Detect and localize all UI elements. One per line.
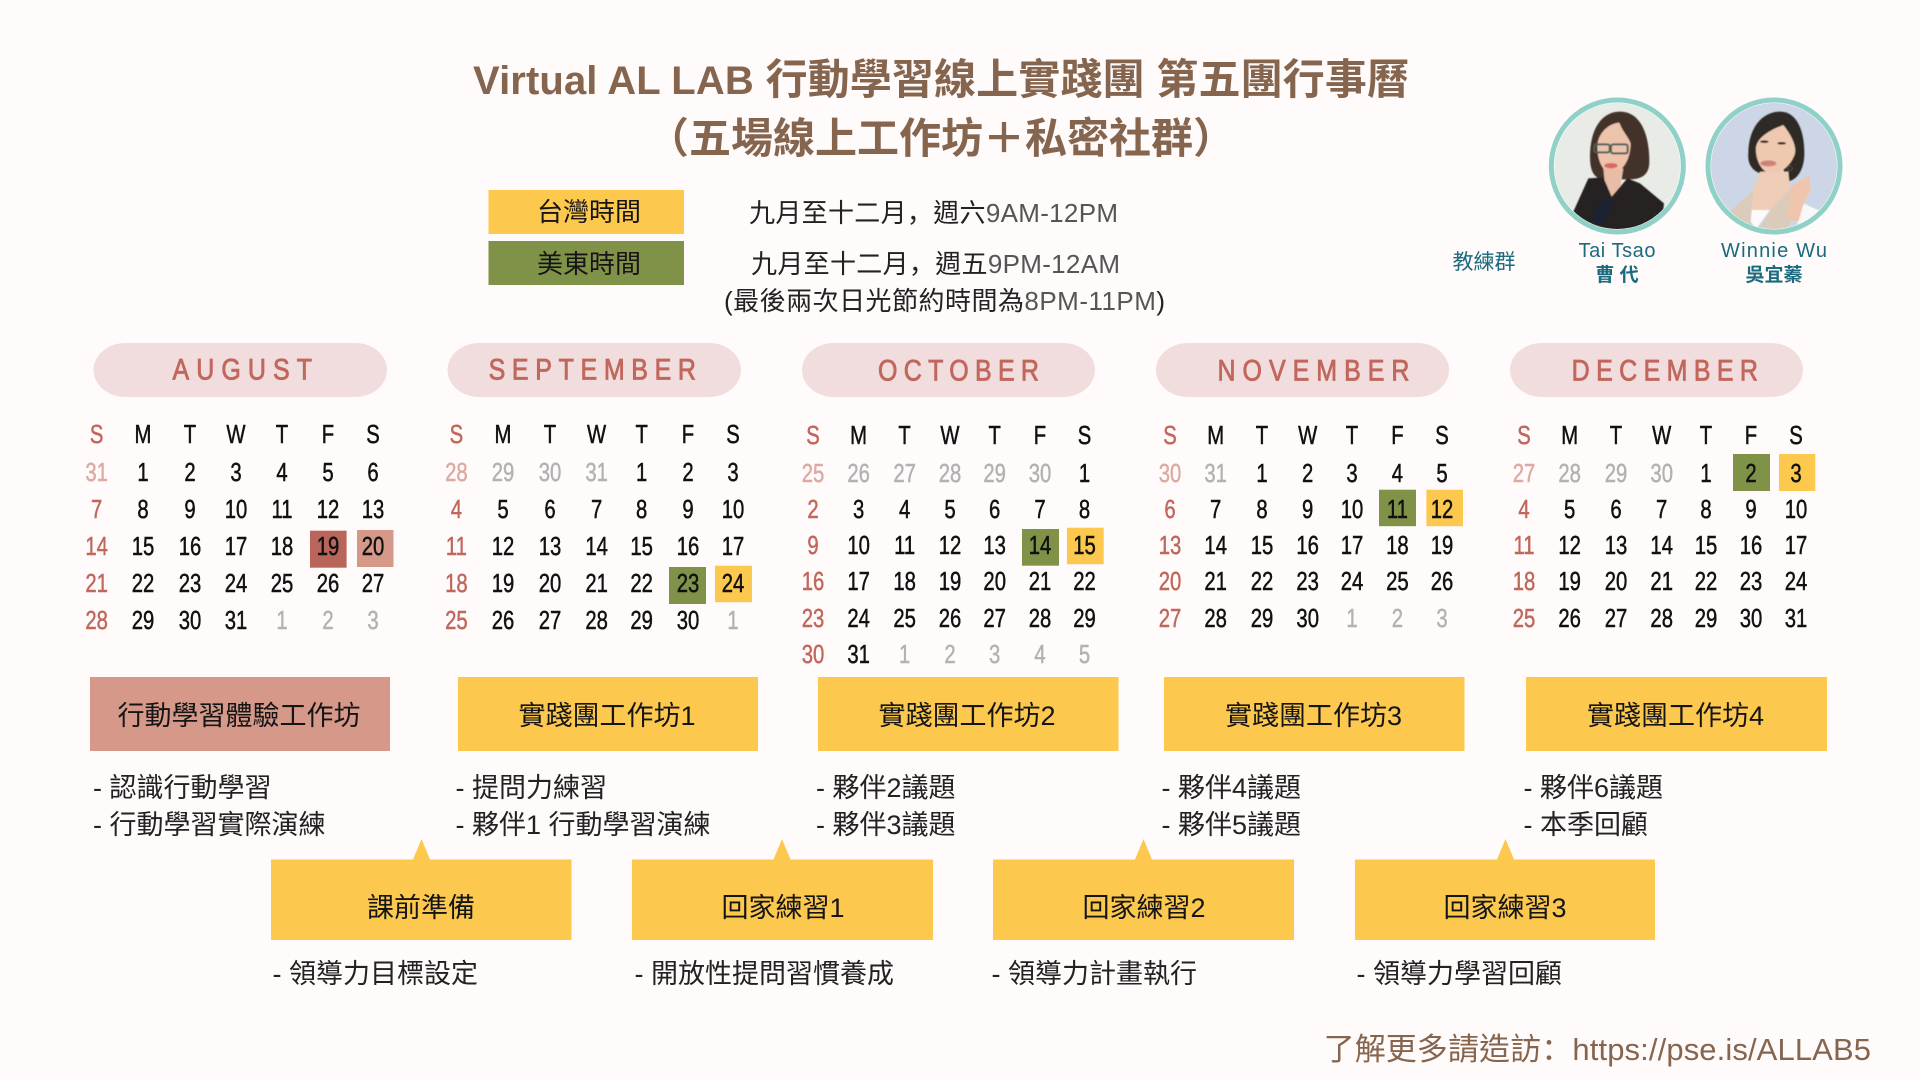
- workshop box: workshop 1: [458, 677, 758, 751]
- date grid: November: 2: [1392, 604, 1403, 633]
- legend: Taiwan time: [488, 190, 1118, 234]
- date grid: August: 31: [225, 606, 247, 635]
- date grid: August: 2: [322, 606, 334, 635]
- date grid: September: 3: [727, 458, 739, 487]
- date grid: November: 30: [1296, 604, 1319, 633]
- date grid: August: 25: [271, 569, 293, 598]
- date grid: September: M: [495, 420, 511, 449]
- coaches label: 教練群: [1452, 251, 1516, 274]
- date grid: December: 27: [1513, 459, 1535, 488]
- date grid: December: 27: [1605, 604, 1627, 633]
- portrait: Tai Tsao: [1550, 100, 1687, 233]
- date grid: September: S: [726, 420, 740, 449]
- highlighted days: 11 and 12 November: [1379, 490, 1463, 526]
- date grid: October: 5: [1079, 640, 1090, 669]
- date grid: October: 8: [1079, 495, 1090, 524]
- highlighted days: 23 and 24 September: [669, 566, 752, 604]
- date grid: August: 2: [184, 458, 196, 487]
- date grid: December: 15: [1695, 531, 1717, 560]
- date grid: September: 1: [636, 458, 647, 487]
- date grid: September: F: [682, 420, 694, 449]
- date grid: December: [1513, 421, 1807, 633]
- date grid: August: 3: [230, 458, 242, 487]
- date grid: December: 3: [1790, 459, 1802, 488]
- date grid: November: 16: [1296, 531, 1319, 560]
- date grid: October: 16: [802, 567, 824, 596]
- callout note: pre-course preparation: - 領導力目標設定: [272, 959, 478, 989]
- date grid: November: 18: [1386, 531, 1409, 560]
- date grid: September: 31: [585, 458, 608, 487]
- calendar: August: [85, 343, 394, 635]
- date grid: November: 14: [1204, 531, 1227, 560]
- date grid: August: 21: [85, 569, 108, 598]
- date grid: November: 10: [1341, 495, 1363, 524]
- date grid: August: 11: [271, 495, 293, 524]
- date grid: August: W: [226, 420, 246, 449]
- date grid: August: 1: [276, 606, 288, 635]
- footer link: 了解更多請造訪：https://pse.is/ALLAB5: [1324, 1024, 1871, 1069]
- date grid: December: 2: [1745, 459, 1757, 488]
- calendar: September: [445, 343, 752, 635]
- date grid: October: 31: [847, 640, 870, 669]
- date grid: October: S: [1078, 421, 1091, 450]
- date grid: November: 17: [1341, 531, 1363, 560]
- date grid: November: 12: [1431, 495, 1453, 524]
- date grid: December: 19: [1558, 567, 1581, 596]
- date grid: December: 31: [1785, 604, 1807, 633]
- date grid: September: 2: [682, 458, 694, 487]
- date grid: December: 20: [1605, 567, 1627, 596]
- coach name: Tai Tsao: 曹 代: [1595, 264, 1639, 286]
- workshop notes: workshop 2: - 夥伴2議題: [816, 773, 956, 803]
- date grid: December: 5: [1564, 495, 1575, 524]
- date grid: August: 9: [184, 495, 196, 524]
- callout: homework 1: [632, 839, 933, 940]
- date grid: September: 14: [585, 532, 608, 561]
- date grid: October: 23: [802, 604, 824, 633]
- date grid: August: 26: [317, 569, 339, 598]
- date grid: October: 17: [847, 567, 870, 596]
- date grid: October: 3: [989, 640, 1000, 669]
- date grid: September: 23: [677, 569, 699, 598]
- month banner: December: [1510, 343, 1803, 397]
- date grid: September: T: [636, 420, 648, 449]
- date grid: October: M: [850, 421, 867, 450]
- date grid: August: S: [366, 420, 380, 449]
- workshop notes: experience workshop: [93, 773, 326, 840]
- date grid: December: 17: [1785, 531, 1807, 560]
- date grid: December: 8: [1700, 495, 1712, 524]
- date grid: September: 6: [544, 495, 556, 524]
- date grid: October: 29: [983, 459, 1006, 488]
- date grid: October: 11: [894, 531, 915, 560]
- date grid: October: 21: [1029, 567, 1051, 596]
- date grid: December: 6: [1610, 495, 1622, 524]
- workshop notes: workshop 3: - 夥伴5議題: [1162, 810, 1301, 840]
- date grid: September: 19: [492, 569, 514, 598]
- date grid: September: 9: [682, 495, 694, 524]
- callout note: homework 3: - 領導力學習回顧: [1356, 959, 1562, 989]
- date grid: November: 26: [1431, 567, 1453, 596]
- date grid: August: 29: [132, 606, 154, 635]
- date grid: October: 6: [989, 495, 1000, 524]
- date grid: December: F: [1745, 421, 1757, 450]
- date grid: August: 20: [362, 532, 384, 561]
- date grid: September: 5: [497, 495, 509, 524]
- date grid: October: 26: [939, 604, 961, 633]
- date grid: September: 24: [722, 569, 744, 598]
- date grid: December: 26: [1558, 604, 1581, 633]
- date grid: August: 31: [85, 458, 108, 487]
- date grid: November: 24: [1341, 567, 1363, 596]
- date grid: October: 2: [807, 495, 819, 524]
- date grid: November: 21: [1204, 567, 1227, 596]
- date grid: October: T: [898, 421, 911, 450]
- date grid: November: F: [1391, 421, 1404, 450]
- date grid: August: 13: [362, 495, 384, 524]
- date grid: December: W: [1652, 421, 1671, 450]
- callout: homework 2: 回家練習2: [1082, 893, 1206, 923]
- date grid: August: 27: [362, 569, 384, 598]
- workshop box: workshop 4: 實踐團工作坊4: [1587, 701, 1764, 731]
- month banner: December: DECEMBER: [1572, 354, 1758, 387]
- date grid: October: 19: [939, 567, 961, 596]
- date grid: November: 20: [1159, 567, 1181, 596]
- workshop notes: workshop 4: - 夥伴6議題: [1524, 773, 1663, 803]
- workshop box: workshop 2: [818, 677, 1118, 751]
- calendar: December: [1510, 343, 1815, 633]
- date grid: September: 28: [585, 606, 608, 635]
- date grid: September: 8: [636, 495, 647, 524]
- date grid: September: 26: [492, 606, 514, 635]
- date grid: October: F: [1034, 421, 1046, 450]
- date grid: October: 14: [1029, 531, 1051, 560]
- date grid: September: 7: [591, 495, 602, 524]
- date grid: October: 24: [847, 604, 870, 633]
- date grid: November: M: [1207, 421, 1224, 450]
- month banner: October: [802, 343, 1095, 397]
- workshop notes: workshop 1: - 夥伴1 行動學習演練: [456, 810, 711, 840]
- date grid: November: W: [1298, 421, 1317, 450]
- date grid: October: W: [940, 421, 960, 450]
- title: Virtual AL LAB 行動學習線上實踐團 第五團行事曆: [473, 56, 1409, 103]
- date grid: September: S: [450, 420, 463, 449]
- date grid: October: 27: [983, 604, 1006, 633]
- date grid: December: 28: [1558, 459, 1581, 488]
- portrait: Winnie Wu: [1707, 100, 1843, 233]
- workshop notes: experience workshop: - 認識行動學習: [93, 773, 272, 803]
- date grid: November: 15: [1251, 531, 1273, 560]
- date grid: September: 13: [539, 532, 561, 561]
- date grid: December: 12: [1558, 531, 1581, 560]
- callout: homework 3: [1355, 839, 1655, 940]
- date grid: August: 4: [276, 458, 288, 487]
- date grid: December: 16: [1740, 531, 1762, 560]
- month banner: September: [448, 343, 741, 397]
- date grid: September: 30: [677, 606, 699, 635]
- date grid: November: 13: [1159, 531, 1181, 560]
- date grid: October: 4: [1034, 640, 1046, 669]
- date grid: December: 24: [1785, 567, 1807, 596]
- date grid: November: 7: [1210, 495, 1221, 524]
- date grid: October: 1: [899, 640, 910, 669]
- workshop notes: workshop 2: [816, 773, 956, 840]
- date grid: September: 12: [492, 532, 514, 561]
- date grid: August: [85, 420, 384, 635]
- date grid: August: 30: [179, 606, 201, 635]
- date grid: December: 25: [1513, 604, 1535, 633]
- date grid: August: F: [322, 420, 334, 449]
- callout note: homework 2: - 領導力計畫執行: [992, 959, 1197, 989]
- date grid: October: 15: [1073, 531, 1096, 560]
- date grid: September: T: [544, 420, 556, 449]
- workshop notes: workshop 1: [456, 773, 711, 840]
- date grid: September: 27: [539, 606, 561, 635]
- date grid: November: 1: [1346, 604, 1358, 633]
- legend: US Eastern time: 九月至十二月，週五9PM-12AM: [751, 244, 1120, 281]
- workshop box: workshop 1: 實踐團工作坊1: [518, 701, 696, 731]
- date grid: September: W: [587, 420, 606, 449]
- workshop notes: workshop 2: - 夥伴3議題: [816, 810, 956, 840]
- date grid: October: 28: [1029, 604, 1051, 633]
- date grid: November: 8: [1256, 495, 1268, 524]
- date grid: December: M: [1561, 421, 1578, 450]
- date grid: August: 19: [317, 532, 339, 561]
- title: （五場線上工作坊＋私密社群）: [647, 115, 1235, 162]
- date grid: November: 29: [1251, 604, 1273, 633]
- date grid: October: 22: [1073, 567, 1096, 596]
- date grid: September: 20: [539, 569, 561, 598]
- date grid: September: 29: [492, 458, 514, 487]
- date grid: September: 4: [451, 495, 462, 524]
- coach name: Tai Tsao: Tai Tsao: [1578, 240, 1656, 262]
- date grid: November: 3: [1436, 604, 1448, 633]
- date grid: November: 5: [1436, 459, 1448, 488]
- workshop box: workshop 4: [1526, 677, 1827, 751]
- workshop notes: workshop 4: [1524, 773, 1663, 840]
- date grid: August: T: [184, 420, 196, 449]
- date grid: August: 14: [85, 532, 108, 561]
- date grid: October: 25: [802, 459, 824, 488]
- date grid: October: 3: [853, 495, 864, 524]
- date grid: November: 27: [1159, 604, 1181, 633]
- callout note: homework 1: - 開放性提問習慣養成: [634, 959, 894, 989]
- date grid: October: 30: [1029, 459, 1051, 488]
- date grid: November: 6: [1164, 495, 1176, 524]
- date grid: November: 19: [1431, 531, 1453, 560]
- date grid: December: 28: [1650, 604, 1673, 633]
- date grid: December: 7: [1656, 495, 1667, 524]
- date grid: August: S: [90, 420, 103, 449]
- workshop notes: experience workshop: - 行動學習實際演練: [93, 810, 326, 840]
- calendar: November: [1156, 343, 1463, 633]
- date grid: August: 7: [91, 495, 102, 524]
- date grid: October: S: [806, 421, 820, 450]
- workshop notes: workshop 1: - 提問力練習: [456, 773, 607, 803]
- date grid: August: 1: [137, 458, 149, 487]
- date grid: September: [445, 420, 744, 635]
- date grid: December: 9: [1745, 495, 1757, 524]
- date grid: November: 25: [1386, 567, 1409, 596]
- date grid: August: 23: [179, 569, 201, 598]
- date grid: December: 10: [1785, 495, 1807, 524]
- date grid: October: 10: [847, 531, 870, 560]
- month banner: August: [94, 343, 387, 397]
- date grid: August: 15: [132, 532, 154, 561]
- date grid: August: 28: [85, 606, 108, 635]
- date grid: October: 20: [983, 567, 1006, 596]
- date grid: August: M: [135, 420, 151, 449]
- workshop box: workshop 3: 實踐團工作坊3: [1225, 701, 1402, 731]
- date grid: August: 18: [271, 532, 293, 561]
- date grid: September: 22: [630, 569, 653, 598]
- date grid: September: 17: [722, 532, 744, 561]
- date grid: November: 1: [1256, 459, 1268, 488]
- date grid: November: 3: [1346, 459, 1358, 488]
- date grid: September: 15: [630, 532, 653, 561]
- workshop box: workshop 2: 實踐團工作坊2: [878, 701, 1056, 731]
- date grid: December: T: [1610, 421, 1622, 450]
- date grid: October: 5: [944, 495, 956, 524]
- date grid: August: 16: [179, 532, 201, 561]
- workshop box: workshop 3: [1164, 677, 1464, 751]
- date grid: October: 12: [939, 531, 961, 560]
- date grid: December: 1: [1700, 459, 1712, 488]
- date grid: November: 11: [1387, 495, 1408, 524]
- date grid: November: 30: [1159, 459, 1181, 488]
- coach name: Tai Tsao: [1578, 240, 1656, 286]
- date grid: December: 11: [1513, 531, 1535, 560]
- date grid: October: 4: [899, 495, 910, 524]
- month banner: August: AUGUST: [172, 353, 312, 386]
- callout: homework 2: [993, 839, 1294, 940]
- date grid: November: 23: [1296, 567, 1319, 596]
- date grid: October: 29: [1073, 604, 1096, 633]
- date grid: October: 25: [893, 604, 916, 633]
- coach name: Winnie Wu: [1721, 240, 1827, 286]
- date grid: November: 31: [1204, 459, 1227, 488]
- date grid: October: 9: [807, 531, 819, 560]
- date grid: September: 16: [677, 532, 699, 561]
- date grid: November: T: [1256, 421, 1268, 450]
- date grid: December: 22: [1695, 567, 1717, 596]
- date grid: December: S: [1517, 421, 1531, 450]
- workshop notes: workshop 3: - 夥伴4議題: [1162, 773, 1301, 803]
- date grid: December: 13: [1605, 531, 1627, 560]
- month banner: November: [1156, 343, 1449, 397]
- date grid: August: T: [276, 420, 288, 449]
- date grid: December: 23: [1740, 567, 1762, 596]
- date grid: August: 6: [367, 458, 379, 487]
- date grid: December: 30: [1740, 604, 1762, 633]
- date grid: August: 24: [225, 569, 247, 598]
- legend: Taiwan time: 九月至十二月，週六9AM-12PM: [749, 193, 1118, 230]
- highlighted days: 14 and 15 October: [1022, 528, 1104, 566]
- date grid: November: S: [1435, 421, 1449, 450]
- date grid: December: 14: [1650, 531, 1673, 560]
- date grid: September: 28: [445, 458, 468, 487]
- date grid: November: 4: [1392, 459, 1403, 488]
- date grid: August: 8: [137, 495, 149, 524]
- date grid: August: 3: [367, 606, 379, 635]
- highlighted days: 19 and 20 August: [310, 530, 394, 568]
- date grid: December: T: [1700, 421, 1712, 450]
- date grid: September: 10: [722, 495, 744, 524]
- legend: US Eastern time: (最後兩次日光節約時間為8PM-11PM): [724, 286, 1165, 316]
- date grid: October: 27: [893, 459, 916, 488]
- date grid: November: 28: [1204, 604, 1227, 633]
- date grid: December: 18: [1513, 567, 1535, 596]
- date grid: December: 4: [1518, 495, 1530, 524]
- legend: Taiwan time: 台灣時間: [537, 197, 641, 227]
- highlighted days: 2 and 3 December: [1733, 454, 1815, 491]
- workshop box: experience workshop: 行動學習體驗工作坊: [118, 701, 360, 731]
- date grid: August: 17: [225, 532, 247, 561]
- date grid: October: 18: [893, 567, 916, 596]
- workshop box: experience workshop: [90, 677, 390, 751]
- date grid: December: 29: [1695, 604, 1717, 633]
- month banner: September: SEPTEMBER: [489, 353, 696, 386]
- workshop notes: workshop 3: [1162, 773, 1301, 840]
- date grid: October: 28: [939, 459, 961, 488]
- date grid: September: 25: [445, 606, 468, 635]
- month banner: November: NOVEMBER: [1218, 354, 1410, 387]
- workshop notes: workshop 4: - 本季回顧: [1524, 810, 1648, 840]
- date grid: September: 29: [630, 606, 653, 635]
- date grid: November: [1159, 421, 1453, 633]
- date grid: December: 29: [1605, 459, 1627, 488]
- legend: US Eastern time: [488, 241, 1165, 316]
- date grid: November: 9: [1302, 495, 1313, 524]
- date grid: December: S: [1789, 421, 1803, 450]
- date grid: December: 30: [1650, 459, 1673, 488]
- date grid: November: 2: [1302, 459, 1313, 488]
- title: [473, 56, 1409, 162]
- date grid: November: S: [1163, 421, 1177, 450]
- legend: US Eastern time: 美東時間: [537, 249, 641, 279]
- date grid: October: 1: [1079, 459, 1090, 488]
- callout: homework 1: 回家練習1: [721, 893, 845, 923]
- month banner: October: OCTOBER: [878, 354, 1039, 387]
- coach name: Winnie Wu: Winnie Wu: [1721, 240, 1827, 262]
- date grid: September: 1: [727, 606, 739, 635]
- date grid: August: 10: [225, 495, 247, 524]
- date grid: August: 5: [322, 458, 334, 487]
- date grid: October: 7: [1034, 495, 1046, 524]
- date grid: September: 11: [446, 532, 467, 561]
- coach name: Winnie Wu: 吳宜蓁: [1745, 263, 1803, 286]
- date grid: November: T: [1346, 421, 1358, 450]
- callout: pre-course preparation: 課前準備: [367, 893, 475, 923]
- date grid: December: 21: [1650, 567, 1673, 596]
- date grid: September: 30: [539, 458, 561, 487]
- date grid: October: 30: [802, 640, 824, 669]
- date grid: November: 22: [1251, 567, 1273, 596]
- date grid: September: 18: [445, 569, 468, 598]
- date grid: October: 26: [847, 459, 870, 488]
- date grid: October: 13: [983, 531, 1006, 560]
- date grid: October: [802, 421, 1096, 669]
- date grid: August: 22: [132, 569, 154, 598]
- date grid: October: 2: [944, 640, 956, 669]
- date grid: October: T: [989, 421, 1001, 450]
- callout: pre-course preparation: [271, 839, 572, 940]
- date grid: August: 12: [317, 495, 339, 524]
- calendar: October: [802, 343, 1104, 669]
- date grid: September: 21: [585, 569, 608, 598]
- callout: homework 3: 回家練習3: [1443, 893, 1567, 923]
